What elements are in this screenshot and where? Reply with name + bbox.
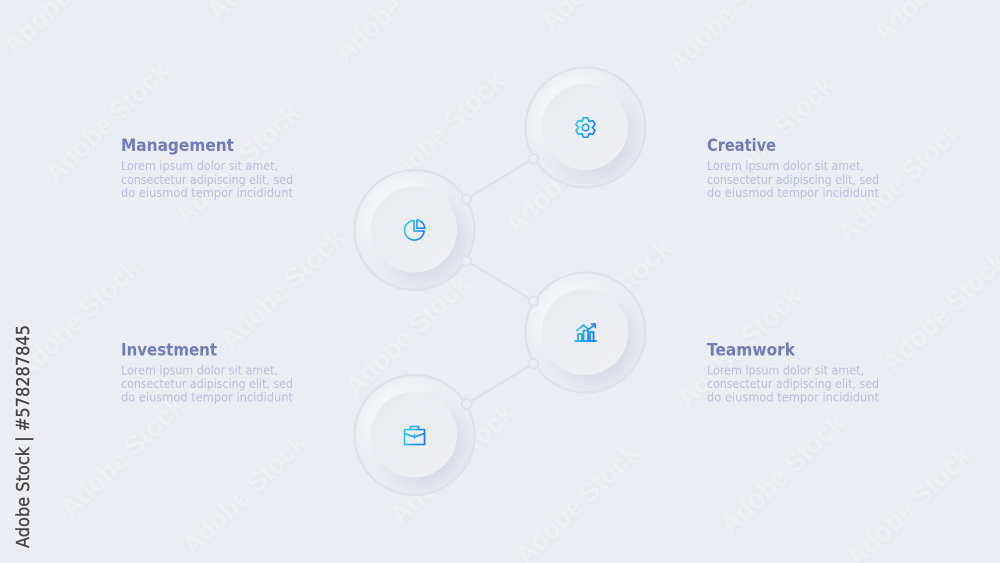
watermark pattern: Adobe Stock xyxy=(499,107,636,240)
watermark pattern: Adobe Stock xyxy=(714,407,851,540)
circle: teamwork xyxy=(526,272,646,392)
icon: gear xyxy=(576,118,595,137)
stock id label: Adobe Stock | #578287845 xyxy=(13,325,34,548)
text block: management xyxy=(121,136,293,200)
text block: creative xyxy=(707,136,879,200)
connector lines xyxy=(466,158,534,404)
watermark pattern: Adobe Stock xyxy=(704,70,841,203)
text block: management: Management xyxy=(121,136,234,156)
watermark pattern: Adobe Stock xyxy=(54,390,191,523)
text block: investment: Investment xyxy=(121,340,217,360)
watermark pattern: Adobe Stock xyxy=(176,427,313,560)
watermark pattern: Adobe Stock xyxy=(384,397,521,530)
text block: creative: Lorem ipsum dolor sit amet, xyxy=(707,158,864,173)
circle: management xyxy=(354,170,474,290)
watermark pattern: Adobe Stock xyxy=(671,280,808,413)
watermark pattern: Adobe Stock xyxy=(541,232,678,365)
text block: investment: do eiusmod tempor incididunt xyxy=(121,390,293,404)
text block: teamwork xyxy=(707,340,879,404)
text block: investment: consectetur adipiscing elit, sed xyxy=(121,376,293,391)
text block: creative: consectetur adipiscing elit, sed xyxy=(707,172,879,187)
circle: creative xyxy=(526,68,646,188)
text block: management: Lorem ipsum dolor sit amet, xyxy=(121,158,278,173)
text block: teamwork: Teamwork xyxy=(707,340,796,360)
text block: management: do eiusmod tempor incididunt xyxy=(121,185,293,200)
watermark pattern: Adobe Stock xyxy=(39,55,176,188)
watermark pattern: Adobe Stock xyxy=(374,65,511,198)
icon: pie chart xyxy=(405,220,425,240)
text block: teamwork: consectetur adipiscing elit, sed xyxy=(707,376,879,391)
text block: teamwork: do eiusmod tempor incididunt xyxy=(707,390,879,404)
watermark pattern: Adobe Stock xyxy=(169,97,306,230)
icon: briefcase xyxy=(404,426,424,444)
text block: management: consectetur adipiscing elit, sed xyxy=(121,172,293,187)
text block: creative: Creative xyxy=(707,136,776,156)
icon: growth chart xyxy=(575,324,596,341)
watermark pattern: Adobe Stock xyxy=(339,268,476,401)
text block: creative: do eiusmod tempor incididunt xyxy=(707,185,879,200)
text block: teamwork: Lorem ipsum dolor sit amet, xyxy=(707,362,864,378)
text block: investment xyxy=(121,340,293,404)
watermark pattern: Adobe Stock xyxy=(9,252,146,385)
watermark pattern: Adobe Stock xyxy=(214,222,351,355)
text block: investment: Lorem ipsum dolor sit amet, xyxy=(121,362,278,378)
circle: investment xyxy=(354,375,474,495)
watermark pattern: Adobe Stock xyxy=(831,115,968,248)
connector nodes xyxy=(462,154,538,409)
